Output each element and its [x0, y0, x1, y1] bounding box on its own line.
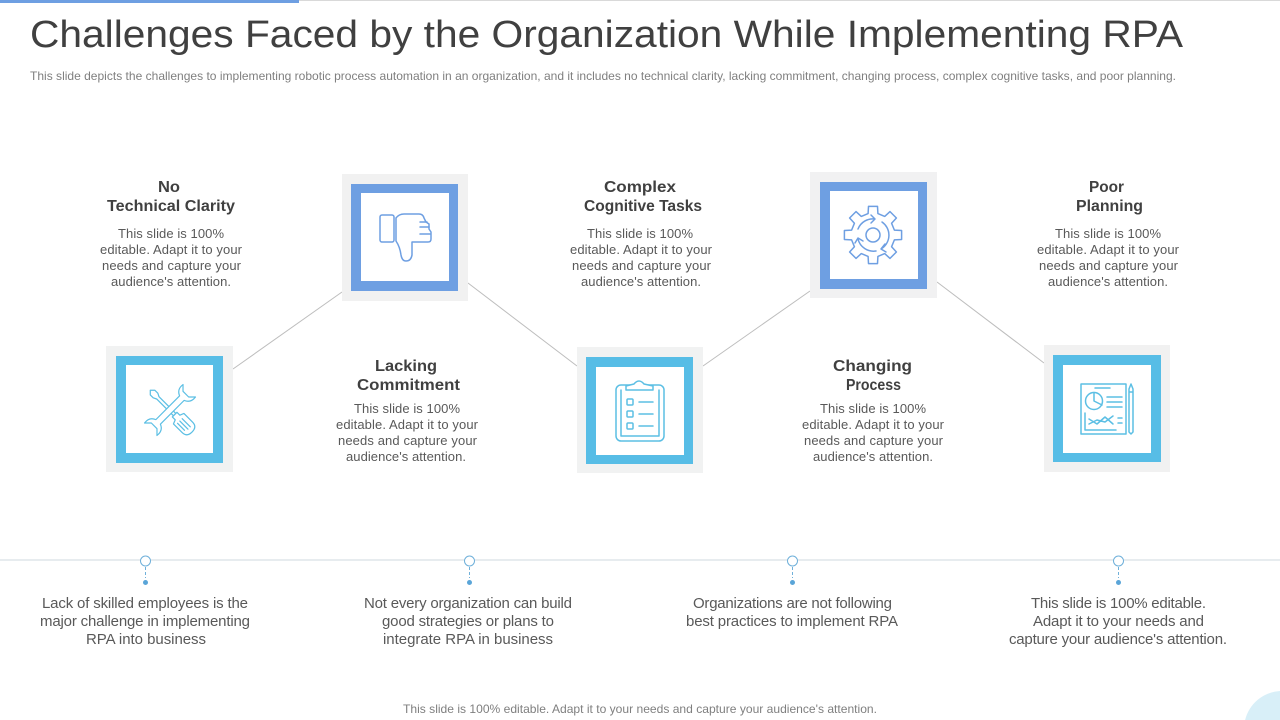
text block: Lacking Commitment — [336, 358, 479, 464]
icon: report with pie chart and pencil — [1081, 384, 1133, 434]
timeline marker 1 — [140, 556, 150, 585]
text block: Lacking Commitment: editable. Adapt it to your — [336, 417, 479, 432]
caption 3: Organizations are not following — [693, 595, 892, 612]
timeline marker 3 — [788, 556, 798, 585]
caption 2: integrate RPA in business — [383, 631, 553, 648]
icon: thumbs down — [380, 214, 431, 261]
text block: Poor Planning: needs and capture your — [1039, 258, 1179, 273]
text block: Lacking Commitment: needs and capture your — [338, 433, 478, 448]
text block: No Technical Clarity: Technical Clarity — [107, 198, 235, 215]
caption 1: major challenge in implementing — [40, 613, 250, 630]
caption 4: This slide is 100% editable. — [1031, 595, 1206, 612]
footer note: This slide is 100% editable. Adapt it to your needs and capture your audience's attention. — [403, 702, 877, 716]
text block: Lacking Commitment: audience's attention. — [346, 449, 466, 464]
timeline marker 4 — [1114, 556, 1124, 585]
text block: Poor Planning: Planning — [1076, 198, 1143, 215]
caption 2: good strategies or plans to — [382, 613, 554, 630]
text block: Complex Cognitive Tasks: Cognitive Tasks — [584, 198, 702, 215]
text block: Poor Planning — [1037, 179, 1180, 289]
text block: Changing Process: needs and capture your — [804, 433, 944, 448]
text block: Changing Process: Process — [846, 377, 901, 394]
text block: Complex Cognitive Tasks: Complex — [604, 179, 676, 196]
text block: No Technical Clarity: audience's attention. — [111, 274, 231, 289]
text block: Complex Cognitive Tasks: editable. Adapt it to your — [570, 242, 713, 257]
title: Challenges Faced by the Organization While Implementing RPA — [30, 14, 1184, 56]
top progress bar — [0, 0, 1280, 3]
caption 4: Adapt it to your needs and — [1033, 613, 1204, 630]
tile: tools icon — [106, 346, 233, 472]
caption 3 — [686, 595, 898, 630]
subtitle: This slide depicts the challenges to implementing robotic process automation in an organization, and it includes no technical clarity, lacking commitment, changing process, complex cognitive tasks, and poor planning. — [30, 69, 1176, 83]
timeline marker 2 — [464, 556, 474, 585]
text block: Poor Planning: This slide is 100% — [1055, 226, 1161, 241]
tile: clipboard icon — [577, 347, 703, 473]
text block: Lacking Commitment: Commitment — [357, 377, 461, 394]
caption 2: Not every organization can build — [364, 595, 572, 612]
text block: Changing Process: editable. Adapt it to your — [802, 417, 945, 432]
timeline line — [0, 559, 1280, 561]
text block: Changing Process — [802, 358, 945, 464]
tile: report icon — [1044, 345, 1170, 472]
icon: wrench and screwdriver — [144, 384, 197, 437]
caption 1 — [40, 595, 250, 648]
caption 3: best practices to implement RPA — [686, 613, 898, 630]
icon: checklist clipboard — [616, 381, 664, 441]
icon: gear with arrows — [844, 206, 902, 264]
text block: Changing Process: audience's attention. — [813, 449, 933, 464]
text block: No Technical Clarity: This slide is 100% — [118, 226, 224, 241]
tile: thumbs down icon — [342, 174, 468, 301]
text block: Complex Cognitive Tasks: needs and capture your — [572, 258, 712, 273]
text block: Complex Cognitive Tasks: audience's attention. — [581, 274, 701, 289]
caption 4: capture your audience's attention. — [1009, 631, 1227, 648]
text block: No Technical Clarity: editable. Adapt it to your — [100, 242, 243, 257]
text block: Changing Process: This slide is 100% — [820, 401, 926, 416]
text block: Poor Planning: audience's attention. — [1048, 274, 1168, 289]
text block: Complex Cognitive Tasks: This slide is 100% — [587, 226, 693, 241]
text block: Lacking Commitment: Lacking — [375, 358, 437, 375]
text block: Poor Planning: Poor — [1089, 179, 1124, 196]
text block: Lacking Commitment: This slide is 100% — [354, 401, 460, 416]
text block: Changing Process: Changing — [833, 358, 912, 375]
connector lines — [233, 282, 1044, 369]
caption 1: Lack of skilled employees is the — [42, 595, 248, 612]
caption 1: RPA into business — [86, 631, 206, 648]
caption 2 — [364, 595, 572, 648]
text block: Complex Cognitive Tasks — [570, 179, 713, 289]
caption 4 — [1009, 595, 1227, 648]
text block: No Technical Clarity: needs and capture your — [102, 258, 242, 273]
text block: Poor Planning: editable. Adapt it to your — [1037, 242, 1180, 257]
tile: gear icon — [810, 172, 937, 298]
corner decoration circle — [1245, 691, 1280, 720]
text block: No Technical Clarity: No — [158, 179, 180, 196]
text block: No Technical Clarity — [100, 179, 243, 289]
